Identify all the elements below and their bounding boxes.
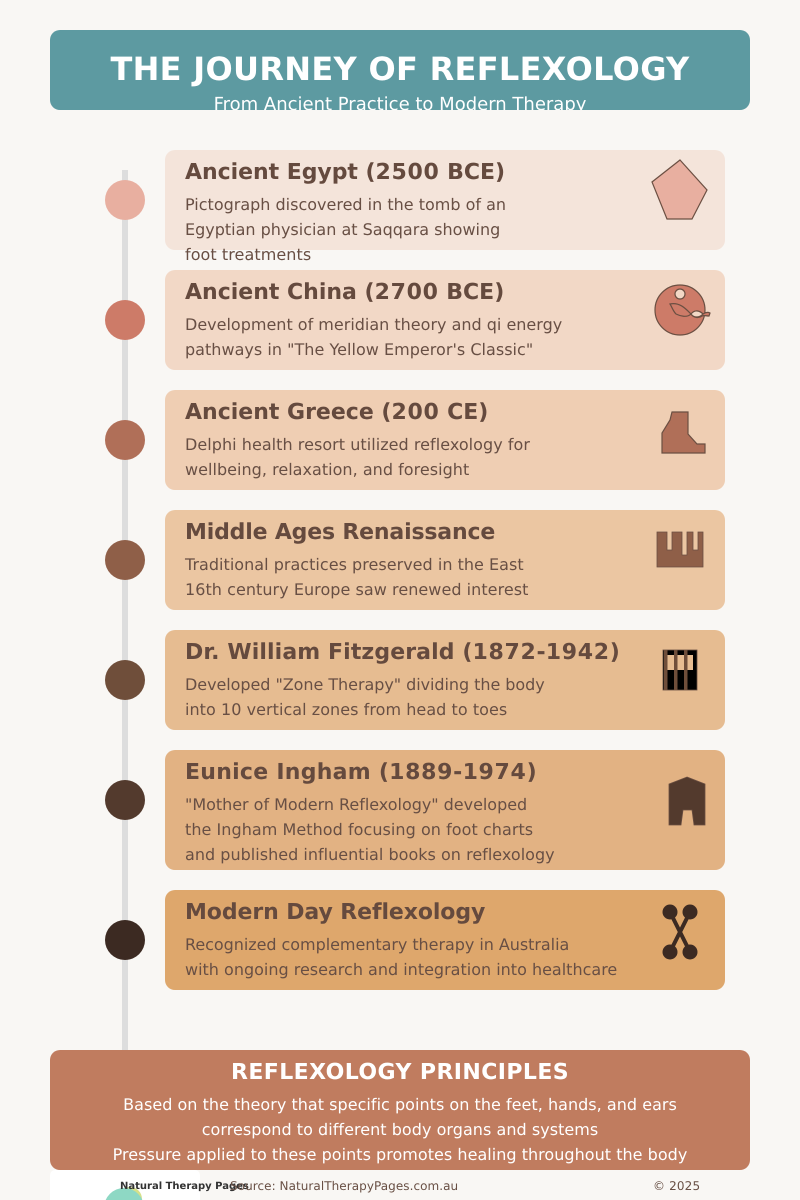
card: Ancient Greece — [105, 390, 725, 490]
node — [105, 660, 145, 700]
description — [184, 555, 528, 599]
description — [185, 795, 555, 864]
logo mark — [106, 1187, 142, 1200]
heading: Dr. William Fitzgerald (1872-1942) — [185, 640, 620, 665]
description: wellbeing, relaxation, and foresight — [185, 460, 469, 479]
principles text: Pressure applied to these points promotes healing throughout the body — [113, 1145, 687, 1164]
description: pathways in "The Yellow Emperor's Classic" — [185, 340, 533, 359]
heading: Ancient Egypt (2500 BCE) — [185, 160, 505, 185]
card: Ancient Egypt — [105, 150, 725, 264]
copyright: © 2025 — [653, 1179, 700, 1193]
card: Modern Day Reflexology — [105, 890, 725, 990]
description: 16th century Europe saw renewed interest — [185, 580, 528, 599]
description: and published influential books on reflexology — [185, 845, 555, 864]
principles heading: REFLEXOLOGY PRINCIPLES — [231, 1060, 569, 1085]
icon: foot — [661, 411, 706, 454]
description: Developed "Zone Therapy" dividing the body — [185, 675, 545, 694]
description: Egyptian physician at Saqqara showing — [185, 220, 500, 239]
title: THE JOURNEY OF REFLEXOLOGY — [110, 50, 690, 88]
description — [185, 935, 617, 979]
node — [105, 180, 145, 220]
description — [185, 435, 530, 479]
icon: pentagon — [651, 159, 708, 220]
node — [105, 300, 145, 340]
heading: Eunice Ingham (1889-1974) — [185, 760, 537, 785]
description: Recognized complementary therapy in Australia — [185, 935, 569, 954]
heading: Ancient China (2700 BCE) — [185, 280, 504, 305]
icon: foot chart — [668, 776, 706, 826]
description: Pictograph discovered in the tomb of an — [185, 195, 506, 214]
icon: vertical zones — [662, 650, 698, 690]
description — [185, 675, 545, 719]
heading: Middle Ages Renaissance — [185, 520, 495, 545]
icon: book pages — [656, 532, 704, 568]
card: Dr. William Fitzgerald — [105, 630, 725, 730]
principles text — [113, 1095, 687, 1164]
logo name: Natural Therapy Pages — [120, 1181, 249, 1192]
principles text: Based on the theory that specific points on the feet, hands, and ears — [123, 1095, 677, 1114]
panel: reflexology principles — [50, 1050, 750, 1170]
node — [105, 540, 145, 580]
node — [105, 420, 145, 460]
logo box — [50, 1170, 200, 1200]
description — [185, 315, 562, 359]
card: Eunice Ingham — [105, 750, 725, 870]
card: Ancient China — [105, 270, 725, 370]
icon: crossed connections — [662, 904, 698, 960]
description: Traditional practices preserved in the East — [185, 555, 524, 574]
node — [105, 920, 145, 960]
principles text: correspond to different body organs and systems — [202, 1120, 598, 1139]
header banner — [50, 30, 750, 110]
node — [105, 780, 145, 820]
heading: Ancient Greece (200 CE) — [185, 400, 488, 425]
description: into 10 vertical zones from head to toes — [185, 700, 507, 719]
heading: Modern Day Reflexology — [185, 900, 485, 925]
icon: circle with meridian — [654, 284, 711, 336]
description: Delphi health resort utilized reflexology for — [185, 435, 530, 454]
source: Source: NaturalTherapyPages.com.au — [230, 1179, 458, 1193]
description: the Ingham Method focusing on foot charts — [185, 820, 533, 839]
description — [185, 195, 506, 264]
description: "Mother of Modern Reflexology" developed — [185, 795, 527, 814]
timeline line — [122, 170, 128, 1070]
description: foot treatments — [185, 245, 311, 264]
card: Middle Ages Renaissance — [105, 510, 725, 610]
description: Development of meridian theory and qi energy — [185, 315, 562, 334]
description: with ongoing research and integration into healthcare — [185, 960, 617, 979]
